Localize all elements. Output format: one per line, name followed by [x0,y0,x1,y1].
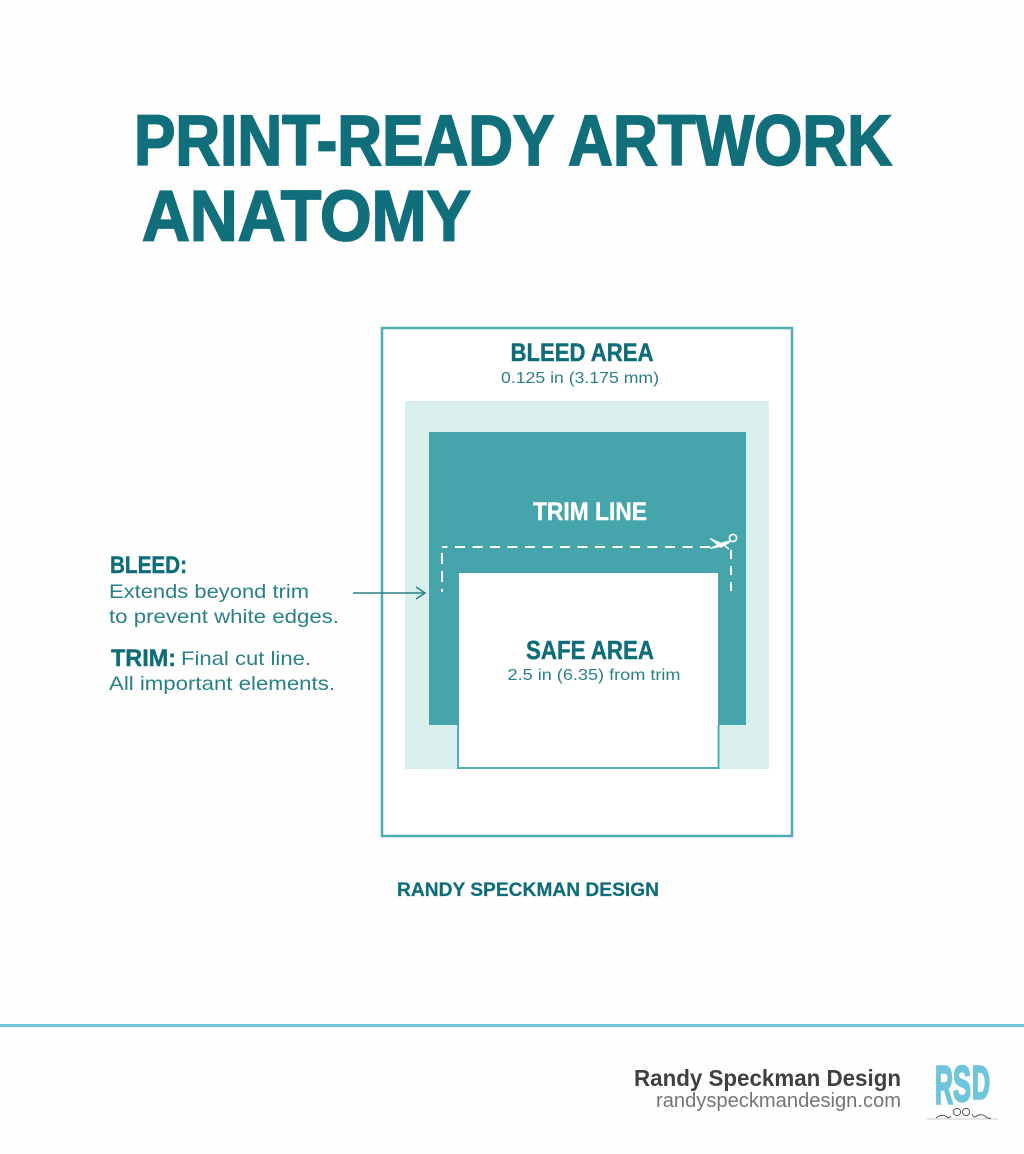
trim line label: TRIM LINE [533,498,647,526]
trim zone [429,432,746,725]
safe area measurement: 2.5 in (6.35) from trim [508,667,680,684]
icon: scissors [710,534,737,549]
caption: designer name: RANDY SPECKMAN DESIGN [397,880,659,901]
text block: bleed definition: Extends beyond trim [109,581,309,603]
text block: trim definition: Final cut line. [181,648,311,670]
footer: RSD logo [927,1056,998,1119]
text block: trim definition: All important elements. [109,673,335,695]
footer: RSD logo: D [972,1056,990,1108]
panel: artwork diagram [382,328,792,836]
title: ANATOMY [142,178,471,256]
footer divider [0,1024,1024,1027]
bleed area heading: BLEED AREA [510,339,654,367]
footer: brand text: Randy Speckman Design [634,1065,901,1091]
safe area box [459,573,718,768]
text block: bleed definition: BLEED: [110,552,187,579]
text block: trim definition [109,645,335,695]
arrow: bleed pointer [353,587,425,599]
footer: brand text: randyspeckmandesign.com [656,1090,901,1112]
safe area heading: SAFE AREA [526,635,654,665]
text block: bleed definition: to prevent white edges. [109,606,339,628]
footer: RSD logo: S [953,1056,971,1112]
bleed zone [405,401,769,769]
bleed area measurement: 0.125 in (3.175 mm) [501,370,659,387]
text block: bleed definition [109,552,339,628]
text block: trim definition: TRIM: [111,645,176,672]
title [134,102,892,256]
title: PRINT-READY ARTWORK [134,102,892,181]
bleed area outer frame [382,328,792,836]
dashed cut line [442,547,731,592]
footer: RSD logo: R [935,1056,953,1116]
footer: brand text [634,1065,901,1112]
